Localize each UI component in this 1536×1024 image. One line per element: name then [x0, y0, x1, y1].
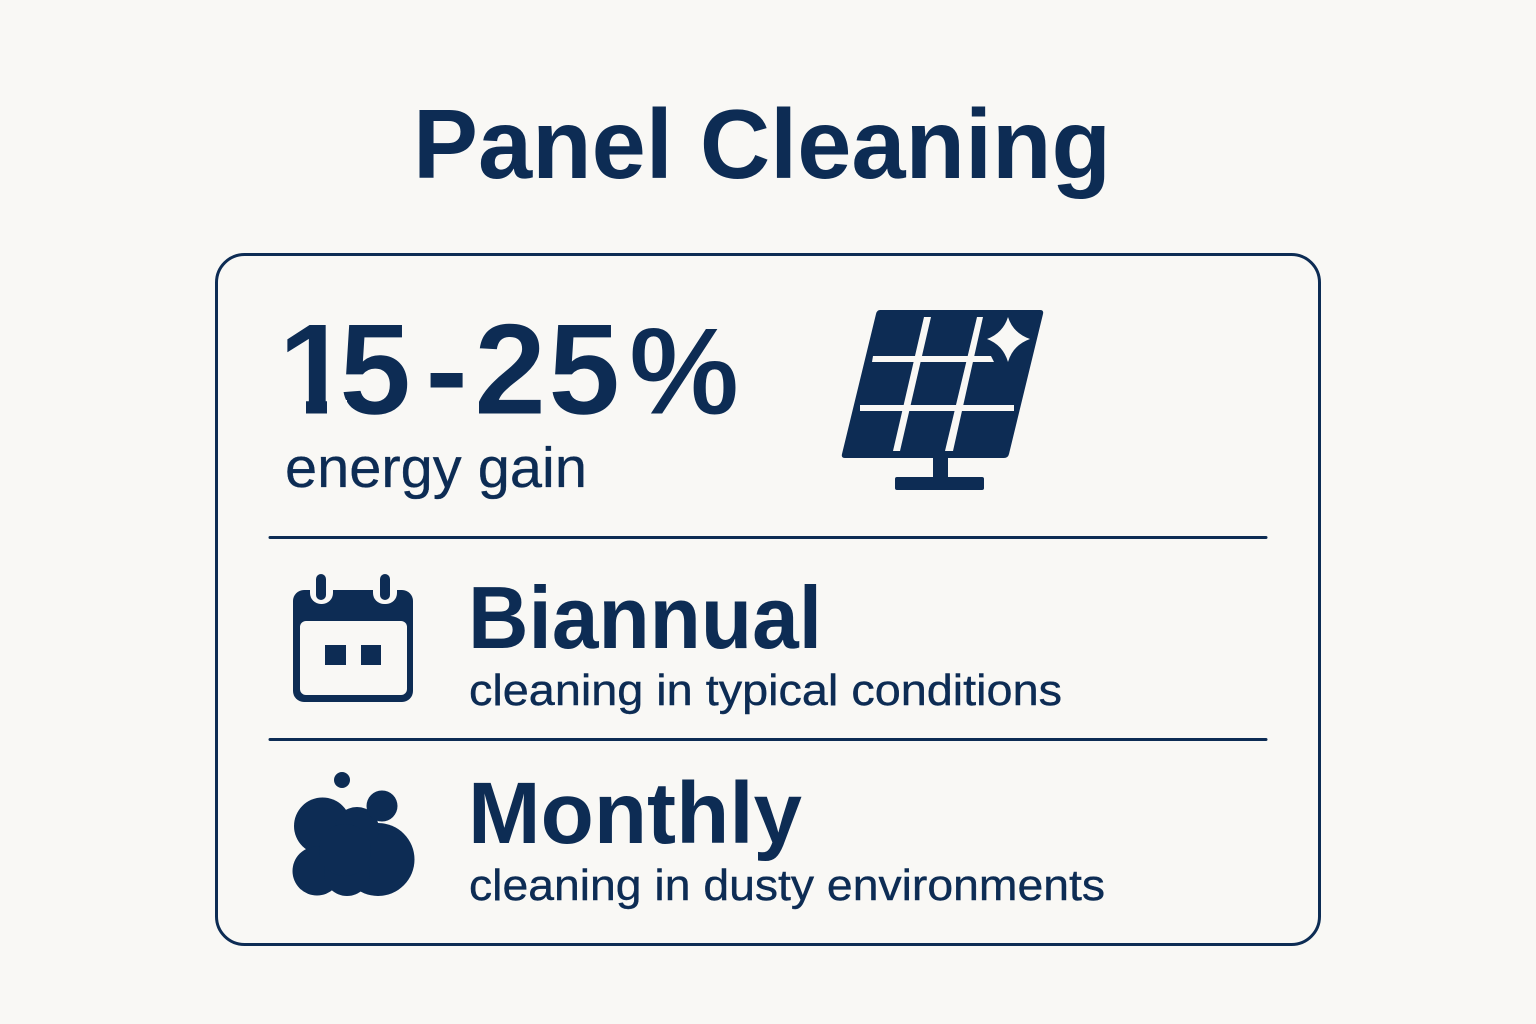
title: Panel Cleaning [413, 89, 1111, 199]
icon: calendar [293, 570, 413, 702]
stat: energy gain [274, 296, 739, 500]
icon: solar panel with sparkle [842, 310, 1043, 490]
stat value: % [629, 303, 739, 441]
stat label: energy gain [285, 436, 587, 500]
row description: cleaning in typical conditions [469, 666, 1062, 715]
icon: soap bubbles [292, 772, 414, 896]
row: monthly [468, 765, 1105, 910]
row heading: Biannual [468, 568, 822, 667]
row heading: Monthly [468, 765, 802, 862]
stat value: 15-25 [278, 296, 620, 442]
row: biannual [468, 568, 1062, 715]
row description: cleaning in dusty environments [469, 861, 1105, 910]
panel: cleaning facts card [216, 254, 1320, 944]
